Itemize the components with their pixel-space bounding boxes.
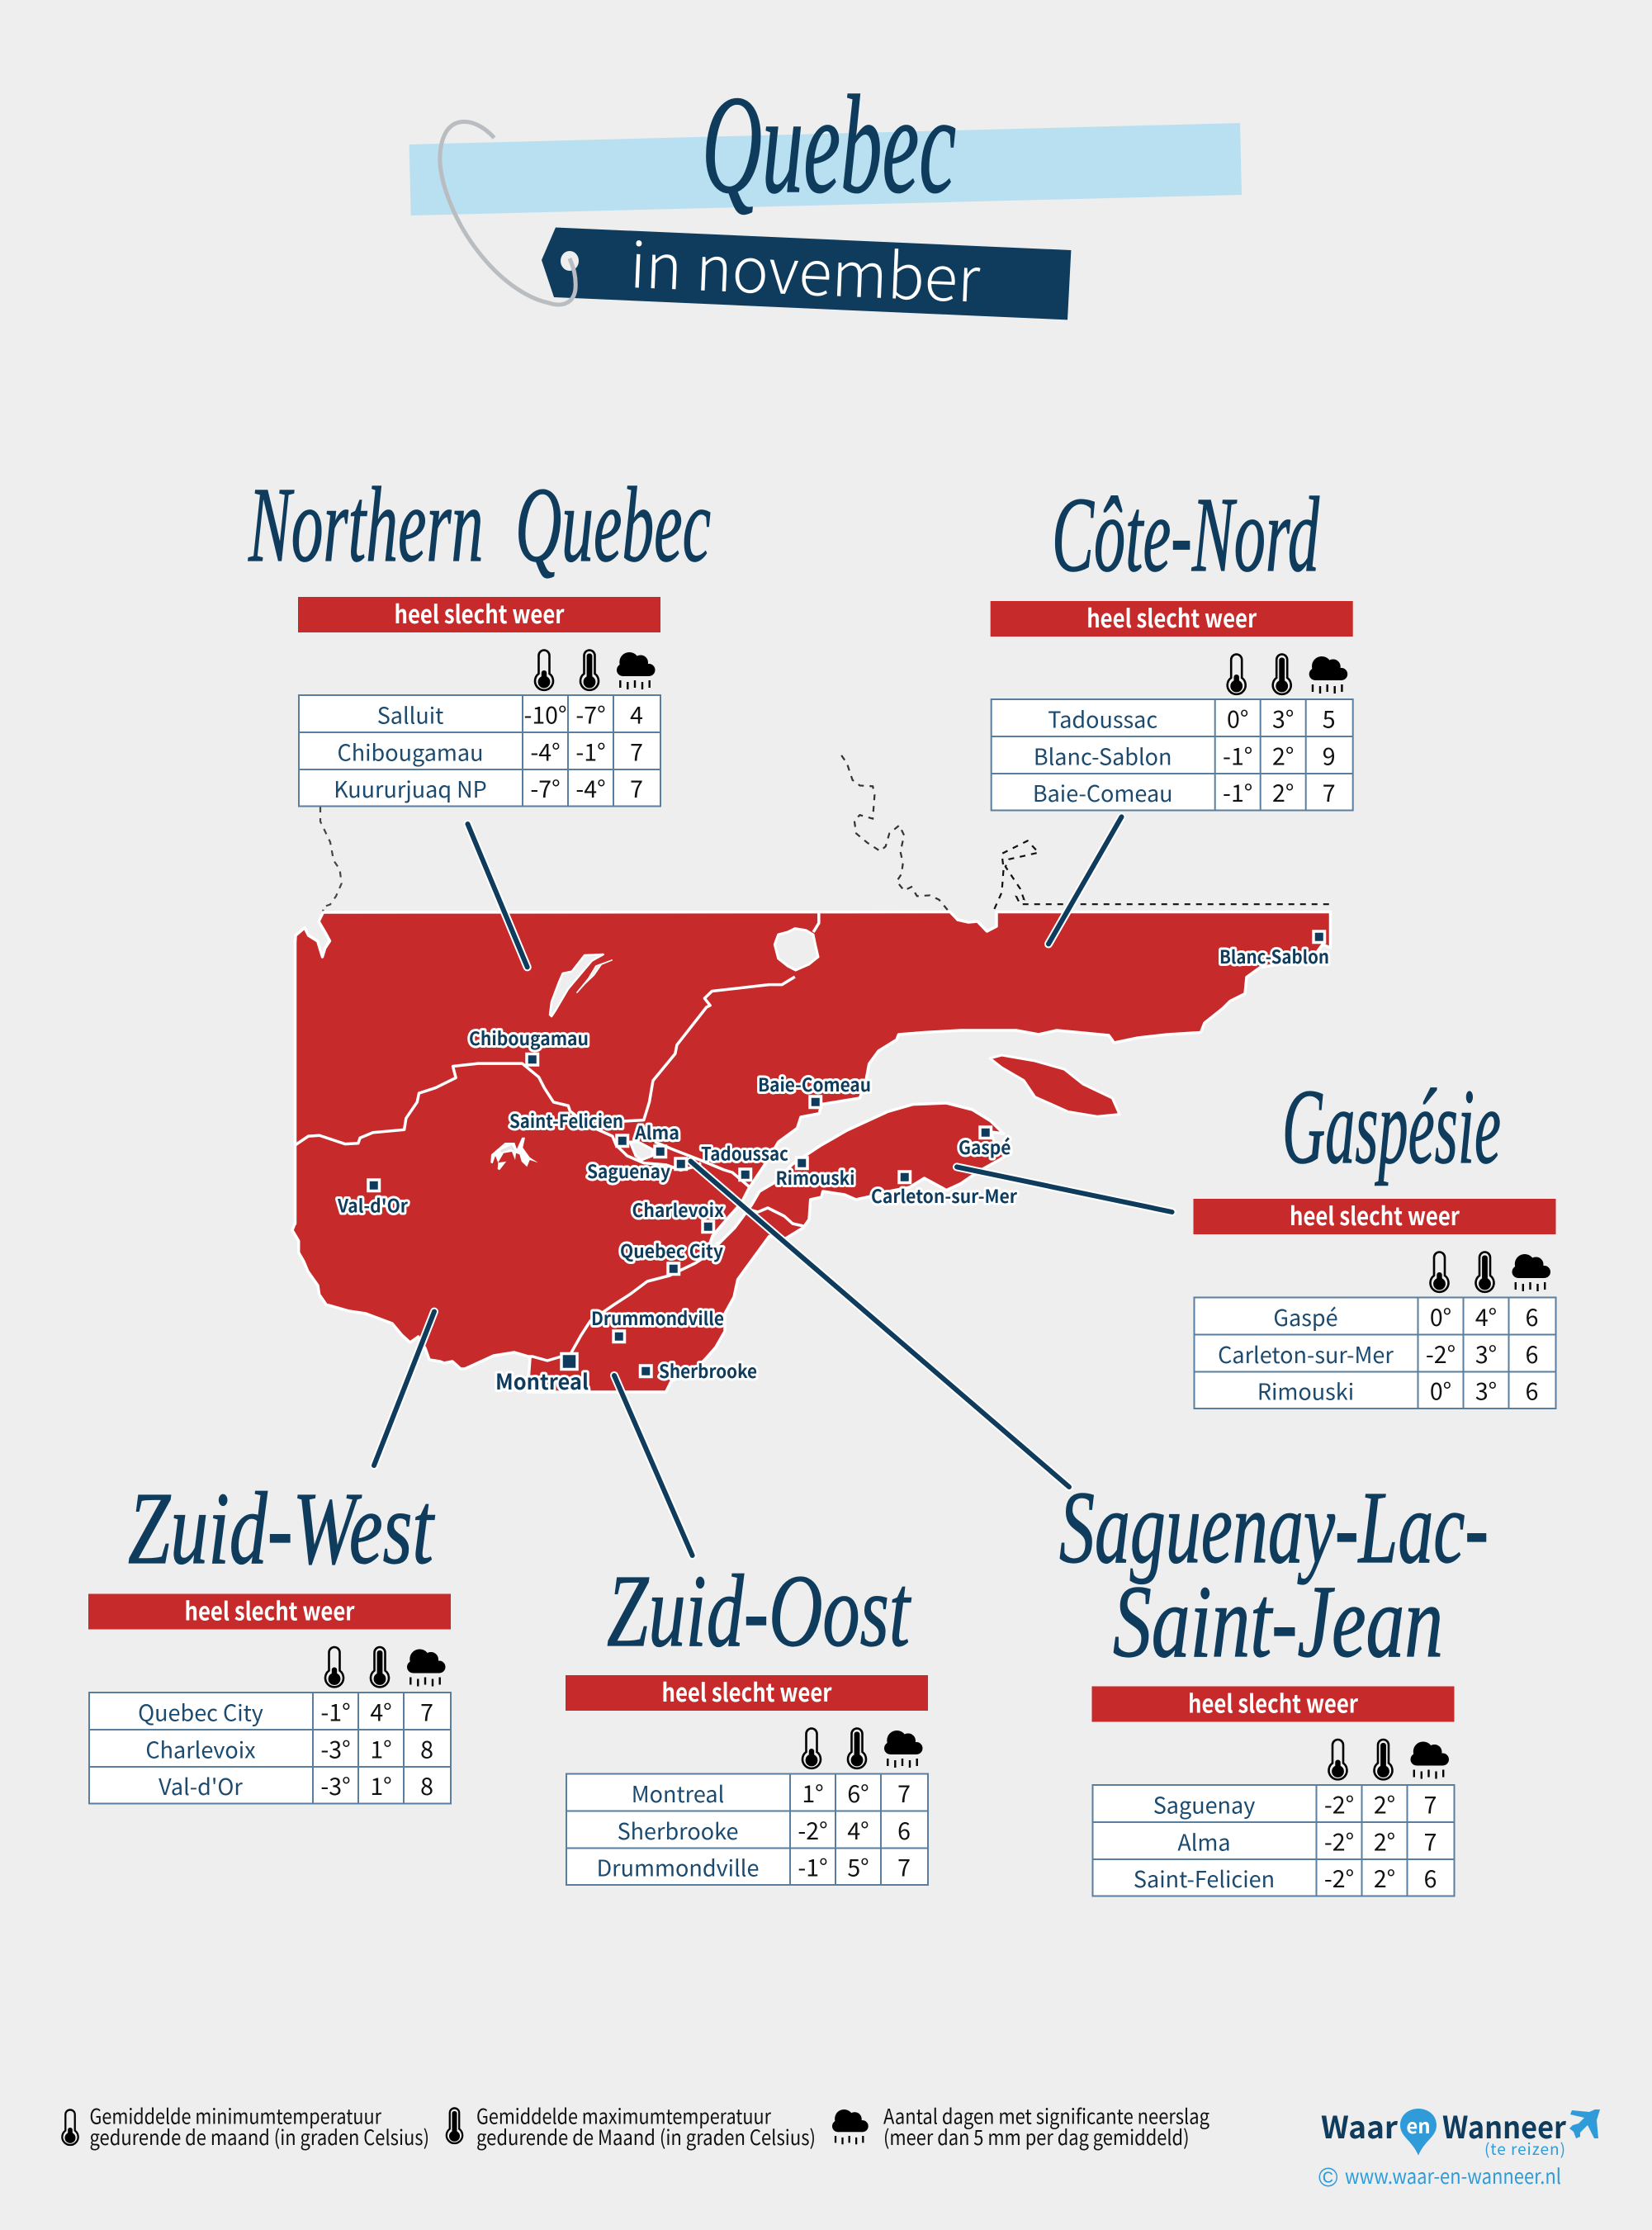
legend: precipitation: (meer dan 5 mm per dag gemiddeld) bbox=[883, 2122, 1189, 2152]
table: 3° bbox=[1475, 1337, 1497, 1371]
icons bbox=[325, 1647, 446, 1687]
table: 1° bbox=[370, 1732, 392, 1765]
table: 5° bbox=[847, 1849, 869, 1884]
panel: Zuid-West bbox=[88, 1472, 451, 1803]
table: 0° bbox=[1227, 702, 1248, 735]
table: Gaspé bbox=[1273, 1300, 1338, 1333]
panel: Zuid-Oost bbox=[566, 1555, 928, 1885]
icons bbox=[1228, 654, 1347, 694]
city labels: Blanc-Sablon bbox=[1219, 943, 1329, 969]
rating bar bbox=[88, 1592, 451, 1630]
city labels: Montreal bbox=[495, 1366, 589, 1396]
table: 8 bbox=[420, 1768, 433, 1802]
table: 6° bbox=[847, 1776, 869, 1810]
table: -3° bbox=[320, 1768, 351, 1802]
table: 4° bbox=[847, 1813, 869, 1847]
table: 0° bbox=[1430, 1374, 1451, 1407]
legend: precipitation: Aantal dagen met significante neerslag bbox=[883, 2100, 1209, 2130]
table: 1° bbox=[370, 1768, 392, 1802]
table: -2° bbox=[1426, 1337, 1456, 1371]
table: 2° bbox=[1374, 1787, 1395, 1821]
table bbox=[992, 699, 1353, 811]
tag loop bbox=[440, 121, 575, 305]
table: 2° bbox=[1374, 1861, 1395, 1895]
legend bbox=[62, 2100, 1209, 2152]
icon: map pin with en: en bbox=[1406, 2110, 1431, 2139]
table: -1° bbox=[1223, 775, 1252, 809]
rating bar: heel slecht weer bbox=[1290, 1196, 1460, 1233]
table: 5 bbox=[1323, 702, 1336, 735]
table: -10° bbox=[523, 697, 567, 731]
table: Tadoussac bbox=[1048, 702, 1157, 735]
rating bar: heel slecht weer bbox=[1188, 1684, 1359, 1721]
table: -4° bbox=[530, 735, 561, 768]
table bbox=[89, 1693, 451, 1803]
table: Montreal bbox=[632, 1777, 724, 1809]
table: 4 bbox=[630, 697, 643, 731]
table: 2° bbox=[1272, 738, 1294, 773]
city labels: Saint-Felicien bbox=[509, 1107, 623, 1134]
table: 8 bbox=[420, 1732, 433, 1765]
border dashes bbox=[320, 755, 1331, 912]
icons bbox=[535, 651, 656, 690]
island: Anticosti bbox=[990, 1055, 1119, 1116]
table: -3° bbox=[320, 1732, 351, 1765]
table: 4° bbox=[370, 1694, 392, 1729]
table: 7 bbox=[1323, 775, 1336, 809]
table: 9 bbox=[1323, 738, 1336, 773]
table: Kuururjuaq NP bbox=[334, 772, 487, 804]
table bbox=[566, 1773, 928, 1885]
title: Quebec: Quebec bbox=[702, 67, 956, 222]
leader line: Northern Quebec bbox=[467, 824, 528, 967]
table: Chibougamau bbox=[337, 735, 484, 768]
lake: Albanel bbox=[576, 960, 613, 993]
city markers bbox=[368, 931, 1324, 1377]
table: -7° bbox=[575, 697, 606, 731]
table bbox=[299, 695, 660, 806]
leader line: Zuid-West bbox=[374, 1312, 434, 1465]
legend: precipitation bbox=[832, 2100, 1209, 2152]
icon: airplane bbox=[1569, 2109, 1600, 2138]
panel: Gaspesie bbox=[1194, 1068, 1555, 1409]
table: 2° bbox=[1272, 775, 1294, 809]
table: 0° bbox=[1430, 1300, 1451, 1333]
table: -2° bbox=[798, 1813, 828, 1847]
leader line: Saguenay bbox=[690, 1161, 1069, 1487]
table bbox=[1093, 1785, 1455, 1896]
heading bbox=[1059, 1471, 1489, 1679]
leader line: Zuid-Oost bbox=[614, 1375, 693, 1555]
table: Baie-Comeau bbox=[1033, 776, 1173, 808]
table: Sherbrooke bbox=[618, 1814, 738, 1846]
city labels: Val-d'Or bbox=[337, 1192, 408, 1219]
city labels: Alma bbox=[634, 1119, 679, 1145]
lake: Manicouagan bbox=[774, 929, 818, 970]
rating bar: heel slecht weer bbox=[1086, 599, 1257, 635]
heading: Saint-Jean bbox=[1113, 1565, 1443, 1679]
tag hole bbox=[561, 251, 579, 271]
icons bbox=[1329, 1740, 1449, 1779]
table: -2° bbox=[1324, 1861, 1354, 1895]
title block bbox=[409, 67, 1242, 320]
table: -1° bbox=[1223, 738, 1252, 773]
lake: Gouin reservoir bbox=[490, 1138, 538, 1170]
table: -1° bbox=[320, 1694, 351, 1729]
leader line: Cote-Nord bbox=[1048, 817, 1121, 944]
table: Val-d'Or bbox=[159, 1769, 243, 1802]
heading: Zuid-West bbox=[128, 1472, 435, 1586]
legend: minimum temperature bbox=[62, 2100, 429, 2152]
table: Salluit bbox=[377, 698, 443, 730]
table: Saguenay bbox=[1153, 1788, 1255, 1820]
city labels: Charlevoix bbox=[632, 1196, 724, 1223]
city labels: Chibougamau bbox=[469, 1025, 589, 1051]
table: 7 bbox=[420, 1694, 433, 1729]
region borders bbox=[295, 912, 819, 1361]
icon: map pin with en bbox=[1400, 2109, 1437, 2156]
legend: minimum temperature: gedurende de maand (in graden Celsius) bbox=[89, 2122, 429, 2152]
table: 6 bbox=[1526, 1337, 1538, 1371]
table: Saint-Felicien bbox=[1134, 1862, 1275, 1894]
lake: Lac Saint-Jean bbox=[630, 1142, 652, 1160]
heading: Northern Quebec bbox=[248, 466, 711, 585]
table: 2° bbox=[1374, 1825, 1395, 1858]
table: Drummondville bbox=[597, 1851, 759, 1882]
table: 3° bbox=[1475, 1374, 1497, 1407]
navy luggage tag bbox=[542, 228, 1071, 320]
table: -1° bbox=[798, 1849, 828, 1884]
rating bar bbox=[1194, 1196, 1555, 1234]
table: -2° bbox=[1324, 1825, 1354, 1858]
legend: maximum temperature: Gemiddelde maximumtemperatuur bbox=[476, 2100, 771, 2130]
panel: Northern Quebec bbox=[248, 466, 711, 806]
table: 4° bbox=[1475, 1300, 1497, 1333]
table: -1° bbox=[575, 735, 606, 768]
city labels: Gaspé bbox=[959, 1134, 1011, 1160]
table: Quebec City bbox=[138, 1696, 263, 1727]
city labels: Sherbrooke bbox=[659, 1357, 757, 1384]
land mass bbox=[292, 911, 1331, 1392]
legend: minimum temperature: Gemiddelde minimumtemperatuur bbox=[89, 2100, 381, 2130]
table: 7 bbox=[630, 735, 643, 768]
table: 6 bbox=[1526, 1374, 1538, 1407]
website: © bbox=[1318, 2162, 1338, 2192]
city labels: Rimouski bbox=[776, 1164, 855, 1191]
tagline: (te reizen) bbox=[1484, 2138, 1565, 2160]
icons bbox=[1430, 1252, 1550, 1292]
city labels: Drummondville bbox=[591, 1304, 724, 1331]
rating bar bbox=[1091, 1684, 1455, 1722]
lake: Mistassini bbox=[550, 954, 604, 1016]
table: 6 bbox=[897, 1813, 911, 1847]
city labels bbox=[337, 943, 1329, 1396]
city labels: Tadoussac bbox=[701, 1139, 788, 1166]
table: 1° bbox=[802, 1776, 824, 1810]
map of Quebec bbox=[292, 911, 1331, 1392]
light blue band bbox=[409, 123, 1242, 215]
heading: Zuid-Oost bbox=[607, 1555, 911, 1669]
rating bar: heel slecht weer bbox=[395, 594, 565, 631]
legend: maximum temperature: gedurende de Maand (in graden Celsius) bbox=[476, 2122, 816, 2152]
table: 3° bbox=[1272, 702, 1294, 735]
panel: Saguenay-Lac-Saint-Jean bbox=[1059, 1471, 1489, 1896]
table: -2° bbox=[1324, 1787, 1354, 1821]
table: Rimouski bbox=[1257, 1374, 1354, 1407]
table: 6 bbox=[1424, 1861, 1437, 1895]
rating bar: heel slecht weer bbox=[662, 1673, 832, 1709]
table: 6 bbox=[1526, 1300, 1538, 1333]
table: 7 bbox=[1424, 1825, 1437, 1858]
table: 7 bbox=[630, 771, 643, 805]
rating bar: heel slecht weer bbox=[185, 1592, 355, 1628]
table: 7 bbox=[897, 1776, 911, 1810]
rating bar bbox=[566, 1673, 928, 1711]
rating bar bbox=[991, 599, 1353, 637]
table: -7° bbox=[530, 771, 561, 805]
table: -4° bbox=[575, 771, 606, 805]
logo word: Waar: Waar bbox=[1321, 2103, 1399, 2147]
panel: Cote-Nord bbox=[991, 476, 1353, 811]
table: Alma bbox=[1177, 1825, 1231, 1858]
legend: maximum temperature bbox=[447, 2100, 816, 2152]
table: 7 bbox=[897, 1849, 911, 1884]
leader line: Gaspesie bbox=[957, 1167, 1172, 1212]
table: Carleton-sur-Mer bbox=[1218, 1338, 1394, 1370]
icons bbox=[802, 1729, 923, 1768]
website: www.waar-en-wanneer.nl bbox=[1345, 2161, 1561, 2190]
table bbox=[1194, 1298, 1555, 1409]
city labels: Carleton-sur-Mer bbox=[871, 1182, 1017, 1209]
city labels: Quebec City bbox=[620, 1237, 723, 1263]
subtitle: in november: in november bbox=[628, 215, 982, 320]
city labels: Saguenay bbox=[587, 1158, 670, 1184]
city labels: Baie-Comeau bbox=[758, 1071, 871, 1097]
table: Blanc-Sablon bbox=[1034, 740, 1172, 771]
table: 7 bbox=[1424, 1787, 1437, 1821]
rating bar bbox=[298, 594, 660, 632]
table: Charlevoix bbox=[145, 1732, 256, 1765]
heading: Côte-Nord bbox=[1052, 476, 1320, 594]
logo word: Wanneer: Wanneer bbox=[1442, 2103, 1567, 2147]
logo: Waar en Wanneer bbox=[1318, 2103, 1600, 2192]
